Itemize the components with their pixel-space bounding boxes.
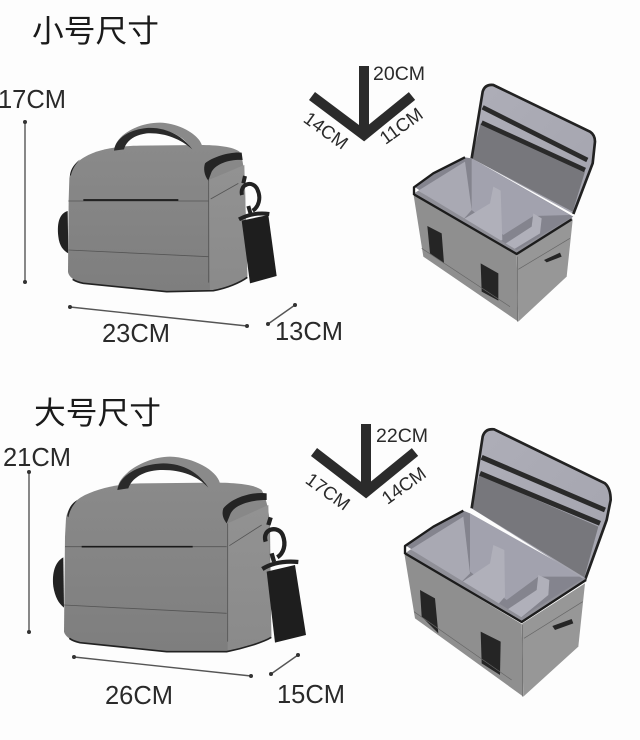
rim zipper: [414, 157, 572, 254]
handle grip: [114, 128, 192, 151]
lid mesh: [472, 123, 585, 212]
lid bands: [482, 107, 587, 170]
left handle tab: [420, 590, 438, 633]
label: 17CM inner: 17CM: [302, 468, 354, 514]
small height dimension: [23, 120, 27, 284]
handle grip: [117, 463, 208, 490]
zipper corner trim: [204, 153, 243, 181]
handle: [117, 457, 220, 489]
bag body: [64, 483, 271, 652]
label: 26CM: 26CM: [105, 682, 173, 710]
small open bag: [413, 85, 595, 322]
label: 21CM: 21CM: [3, 444, 71, 472]
open bag front: [413, 193, 518, 322]
lid bands: [480, 457, 605, 523]
left handle tab: [427, 226, 444, 263]
open bag side: [522, 583, 585, 697]
strap clip: [265, 517, 284, 562]
large depth dimension: [269, 653, 300, 676]
open bag interior: [405, 511, 587, 622]
handle: [114, 123, 202, 150]
large inner dimension arrow: [314, 424, 415, 492]
bag bottom edge: [69, 637, 271, 652]
left top corner trim: [67, 500, 77, 517]
open bag side: [517, 220, 573, 322]
small inner dimension arrow: [312, 66, 412, 135]
large height dimension: [27, 470, 31, 634]
label: 11CM: 11CM: [376, 103, 427, 148]
lid edge: [472, 429, 611, 580]
bag side: [209, 165, 247, 291]
heading: large size: 大号尺寸: [34, 388, 161, 433]
label: 15CM: 15CM: [277, 681, 345, 709]
lid edge: [472, 85, 595, 214]
heading: small size: 小号尺寸: [32, 6, 159, 51]
divider two: [507, 575, 549, 618]
bag seams: [64, 523, 262, 642]
bag bottom edge: [73, 277, 247, 292]
label: 17CM: 17CM: [0, 86, 66, 114]
shoulder strap: [242, 215, 277, 283]
interior left wall: [418, 162, 472, 219]
open bag front: [404, 553, 523, 697]
right handle tab: [481, 263, 498, 301]
zipper corner trim: [223, 493, 267, 523]
bag side: [228, 505, 271, 652]
label: 22CM: 22CM: [376, 425, 428, 447]
lid: [472, 429, 611, 580]
large width dimension: [72, 655, 253, 678]
interior left wall: [411, 517, 470, 583]
front rim lining: [414, 191, 573, 254]
front zipper: [82, 544, 193, 549]
rim zipper: [405, 511, 586, 622]
divider one: [463, 187, 502, 242]
label: 14CM inner: 14CM: [378, 462, 430, 508]
lid mesh: [472, 475, 598, 577]
label: 23CM: 23CM: [102, 320, 170, 348]
side clip: [544, 253, 562, 262]
shoulder strap: [267, 565, 306, 643]
label: 20CM: 20CM: [373, 63, 425, 85]
front seam: [414, 602, 583, 697]
bag body: [68, 145, 247, 292]
side clip: [552, 619, 573, 630]
strap buckle: [262, 562, 298, 569]
front rim lining: [405, 549, 586, 622]
interior back wall: [470, 513, 583, 600]
right handle tab: [481, 632, 501, 675]
front seam: [422, 238, 570, 322]
strap buckle: [239, 213, 269, 219]
small closed bag: [58, 123, 277, 292]
lid: [472, 85, 595, 214]
front zipper: [83, 197, 178, 202]
open bag interior: [414, 157, 573, 253]
divider two: [503, 213, 542, 251]
label: 13CM: 13CM: [275, 318, 343, 346]
small depth dimension: [266, 303, 297, 326]
small width dimension: [68, 305, 249, 328]
divider one: [460, 545, 505, 606]
left top corner trim: [70, 159, 80, 176]
large closed bag: [53, 457, 306, 652]
back strap lump: [53, 557, 64, 608]
strap clip: [242, 176, 259, 214]
large open bag: [404, 429, 611, 697]
back strap lump: [58, 211, 68, 253]
bag seams: [68, 180, 238, 283]
label: 14CM: 14CM: [300, 107, 352, 153]
interior back wall: [472, 158, 570, 235]
